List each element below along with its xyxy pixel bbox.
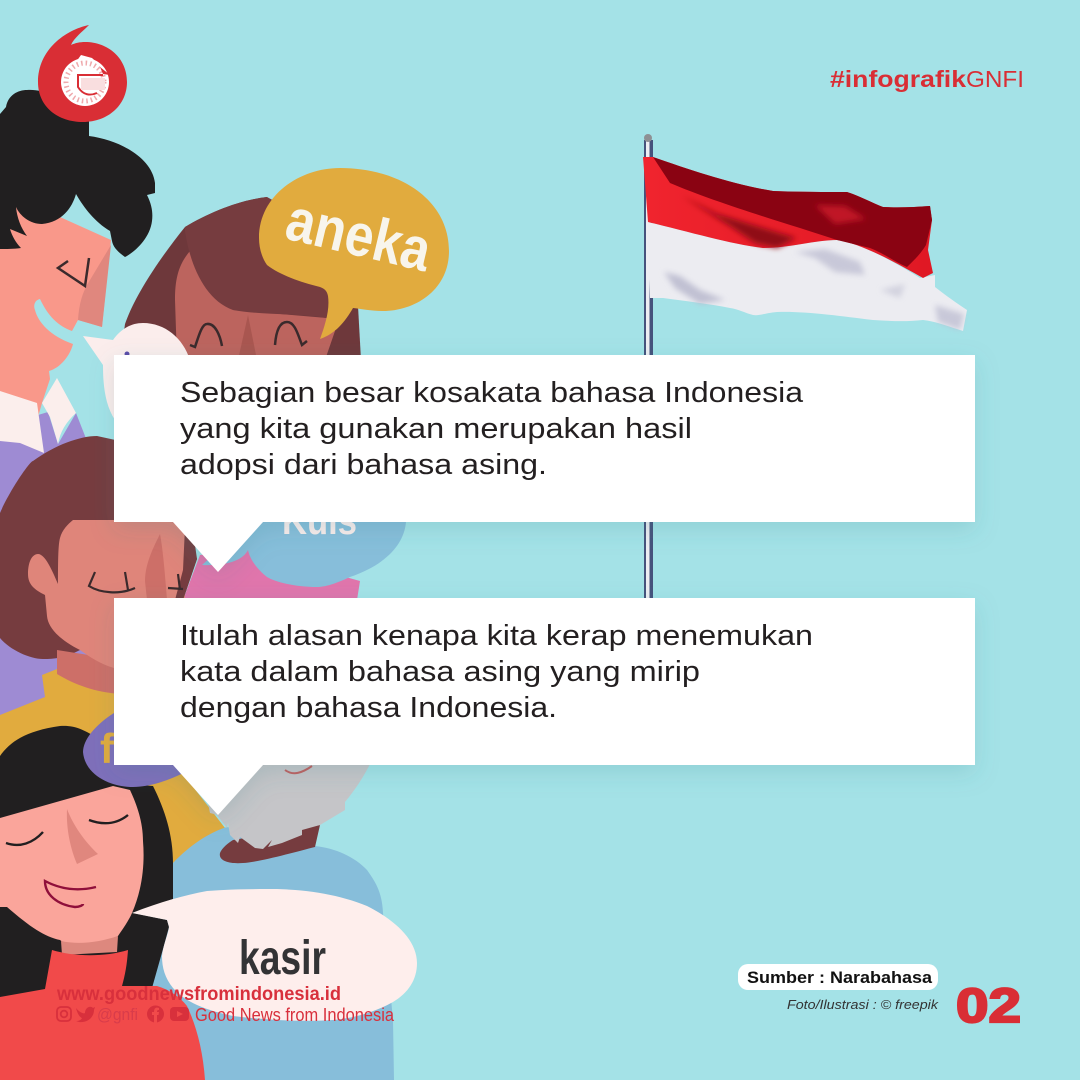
face <box>175 251 335 360</box>
box 1 text: adopsi dari bahasa asing. <box>180 449 547 481</box>
logo: GNFI <box>38 25 127 122</box>
woman with brown hair <box>120 197 361 360</box>
hashtag: GNFI <box>966 66 1024 92</box>
small white speech bubble <box>83 323 190 420</box>
pink shirt <box>183 550 360 600</box>
grey beard <box>205 760 372 849</box>
word: kasir: kasir <box>239 932 326 985</box>
red top <box>0 950 205 1080</box>
icon: twitter <box>76 1007 95 1022</box>
text box 1 <box>114 355 975 572</box>
flag shadows on white <box>664 249 964 330</box>
eye <box>58 258 89 286</box>
eyes <box>89 572 183 592</box>
text box 2 <box>114 598 975 815</box>
hair back <box>120 197 361 360</box>
handle: @gnfi <box>97 1005 138 1024</box>
collar <box>0 391 44 453</box>
photo credit: Foto/Ilustrasi : © freepik <box>787 997 940 1012</box>
flag pole <box>644 134 653 598</box>
grey tuft left of pointer <box>208 803 218 815</box>
icon: instagram <box>57 1007 71 1021</box>
hair <box>0 726 173 1000</box>
eyes <box>6 815 128 845</box>
purple speech bubble <box>83 700 190 787</box>
flag white stripe <box>648 222 967 331</box>
box 1 text: yang kita gunakan merupakan hasil <box>180 413 692 445</box>
word: aneka: aneka <box>280 185 438 284</box>
flag fold highlights <box>682 196 866 248</box>
nose <box>238 315 257 360</box>
source pill <box>738 964 938 990</box>
mouth <box>285 766 312 773</box>
box 1 text <box>180 377 804 481</box>
yellow top <box>0 669 225 863</box>
shirt <box>0 412 100 760</box>
man with brown hair <box>0 436 360 863</box>
woman with black hair <box>0 700 205 1080</box>
word: Kuis: Kuis <box>282 499 357 543</box>
flag red stripe <box>643 157 933 278</box>
icon: facebook <box>147 1006 164 1023</box>
box 2 text <box>180 620 813 724</box>
neck <box>61 936 118 955</box>
neck and face <box>0 190 111 441</box>
hashtag: #infografik <box>830 66 966 92</box>
hashtag <box>830 66 1024 92</box>
right hair <box>175 527 197 600</box>
website: www.goodnewsfromindonesia.id <box>56 984 341 1005</box>
blue shirt <box>150 827 394 1080</box>
speech bubble: aneka <box>259 168 449 339</box>
box 1 panel <box>114 355 975 572</box>
flag and pole <box>643 134 967 598</box>
box 1 text: Sebagian besar kosakata bahasa Indonesia <box>180 377 804 409</box>
box 2 text: Itulah alasan kenapa kita kerap menemukan <box>180 620 813 652</box>
source pill: Sumber : Narabahasa <box>747 968 933 987</box>
nose <box>67 809 98 864</box>
box 2 panel <box>114 598 975 815</box>
fringe <box>185 197 345 318</box>
logo badge <box>38 25 127 122</box>
face <box>0 786 144 945</box>
hair <box>0 436 197 660</box>
flag dark folds <box>653 157 932 267</box>
face <box>28 520 185 670</box>
illustration: people and speech bubbles <box>0 90 449 1080</box>
nose <box>78 245 111 327</box>
hair <box>0 90 155 257</box>
box 2 text: kata dalam bahasa asing yang mirip <box>180 656 700 688</box>
word fragment: f <box>100 725 115 772</box>
nose <box>145 534 167 600</box>
page name: Good News from Indonesia <box>195 1005 395 1025</box>
footer: website and social <box>56 984 395 1025</box>
man with grey beard <box>150 760 394 1080</box>
box 2 text: dengan bahasa Indonesia. <box>180 692 557 724</box>
logo emblem <box>61 55 110 106</box>
brown beard <box>220 825 320 863</box>
icon: youtube <box>170 1007 189 1021</box>
eyes <box>190 322 307 347</box>
man with bun <box>0 90 155 760</box>
neck <box>57 650 120 694</box>
blue speech bubble: Kuis <box>202 499 406 587</box>
mouth <box>45 881 96 907</box>
speech bubble: kasir <box>132 889 417 1021</box>
page number: 02 <box>956 980 1021 1033</box>
